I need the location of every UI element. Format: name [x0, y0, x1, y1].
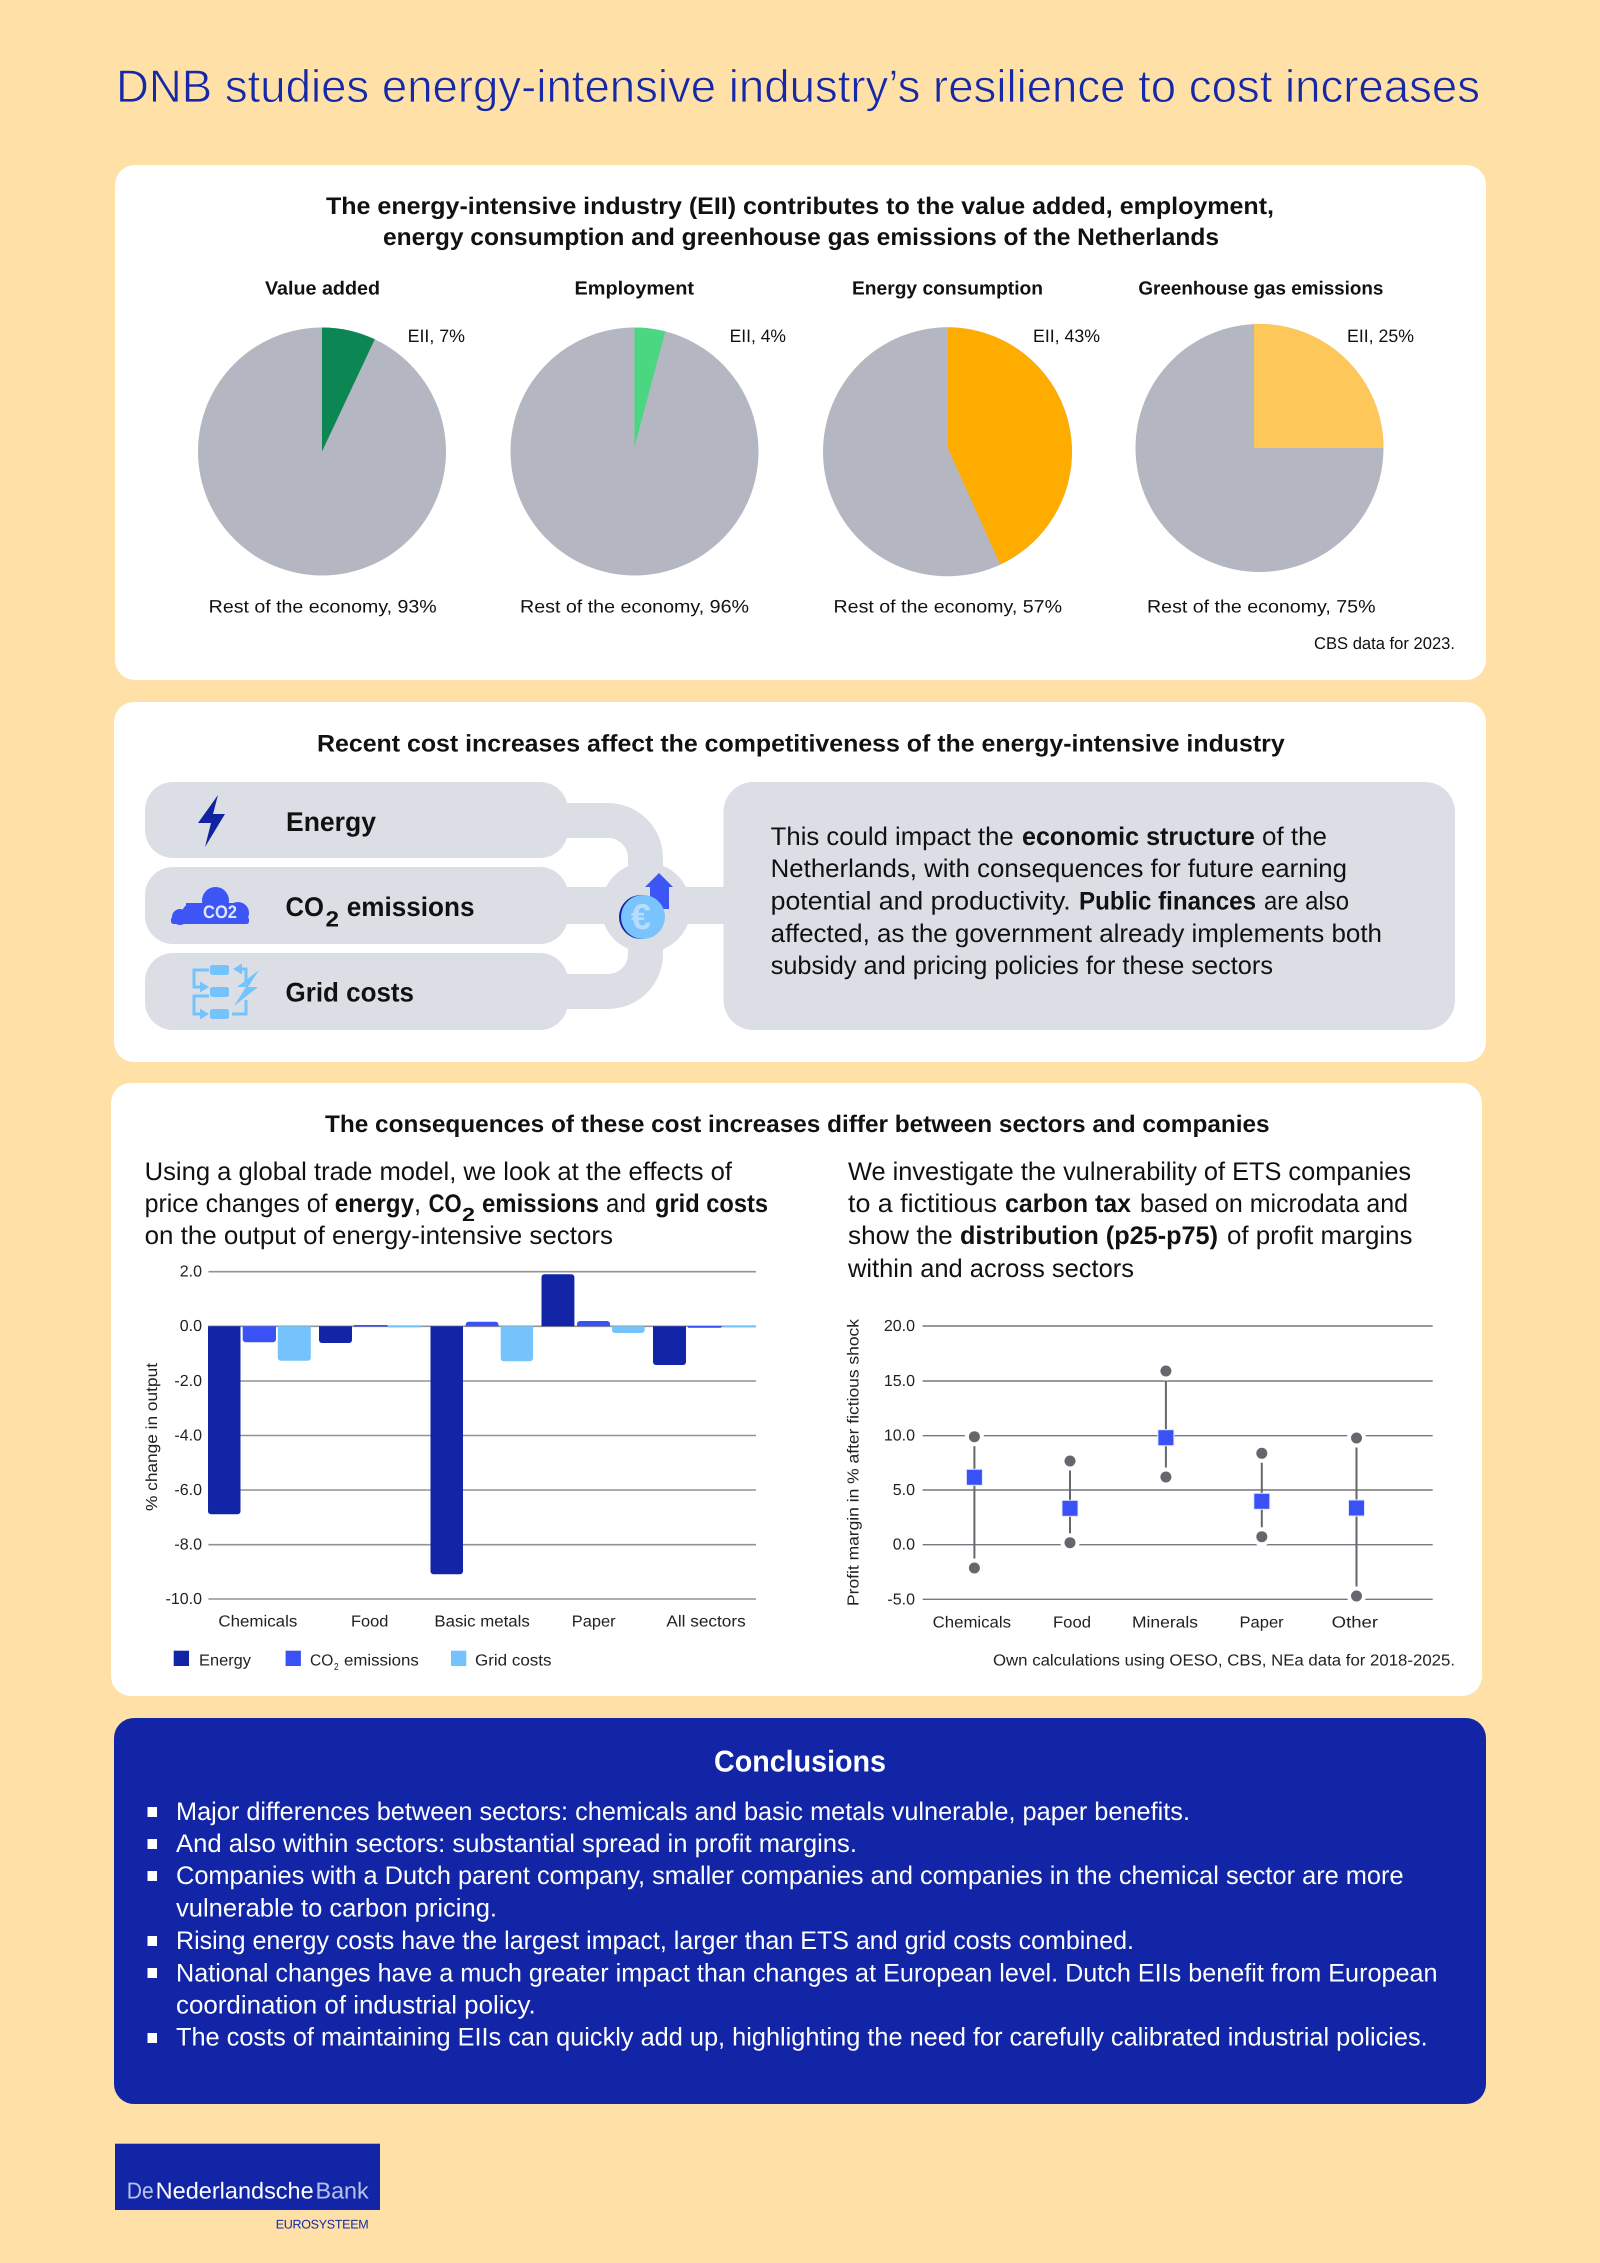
text: ETS vulnerability: of profit margins [1227, 1222, 1412, 1250]
pie chart: energy consumption: Energy consumption [852, 278, 1043, 300]
pill: CO2 emissions [145, 867, 568, 944]
pie chart: employment [510, 278, 786, 616]
legend: emissions [344, 1653, 419, 1670]
text: ETS vulnerability: carbon tax [1005, 1190, 1131, 1218]
text: global trade model: on the output of energy-intensive sectors [145, 1222, 613, 1250]
text: ETS vulnerability: based on microdata and [1140, 1190, 1408, 1218]
source note: CBS: CBS data for 2023. [1314, 634, 1455, 653]
pie chart: greenhouse gas emissions: Greenhouse gas emissions [1138, 278, 1383, 300]
text: ETS vulnerability: within and across sectors [847, 1255, 1134, 1283]
icon: euro coin with up arrow [619, 873, 673, 939]
text: global trade model: Using a global trade model, we look at the effects of [145, 1158, 733, 1186]
y axis ticks: -2.0 [174, 1373, 202, 1390]
bullet list: And also within sectors: substantial spread in profit margins. [176, 1830, 857, 1858]
source note: own calculations: Own calculations using OESO, CBS, NEa data for 2018-2025. [993, 1653, 1455, 1670]
callout: economic structure: economic structure [1022, 823, 1255, 851]
bar chart: change in output [144, 1264, 756, 1673]
bullet list: Companies with a Dutch parent company, smaller companies and companies in the chemical sector are more [176, 1862, 1404, 1890]
text: global trade model: and [606, 1190, 646, 1218]
y axis ticks: 15.0 [884, 1373, 915, 1390]
y axis ticks: -10.0 [166, 1591, 202, 1608]
text: ETS vulnerability: to a fictitious [848, 1190, 997, 1218]
x axis labels: Minerals [1132, 1614, 1198, 1631]
x axis labels: Food [1053, 1614, 1091, 1631]
pie chart: employment: EII, 4% [730, 326, 786, 346]
title: DNB studies energy-intensive industry’s resilience to cost increases [116, 60, 1480, 112]
label: CO2 emissions: 2 [326, 906, 339, 932]
x axis labels [933, 1614, 1379, 1631]
callout: economic structure: affected, as the government already implements both [771, 920, 1382, 948]
bars: grid costs [278, 1326, 756, 1361]
text: ETS vulnerability: We investigate the vulnerability of ETS companies [848, 1158, 1411, 1186]
text: global trade model: , [414, 1190, 421, 1218]
range: minerals [1158, 1366, 1174, 1482]
legend: Energy [199, 1653, 251, 1670]
x axis labels [218, 1614, 746, 1631]
logo: De Nederlandsche Bank: Bank [316, 2177, 369, 2203]
label: CO2 emissions [286, 892, 474, 932]
pie chart: value added: EII, 7% [408, 326, 465, 346]
y axis ticks: 20.0 [884, 1318, 915, 1335]
bullet list: Rising energy costs have the largest impact, larger than ETS and grid costs combined. [176, 1927, 1134, 1955]
x axis labels: Chemicals [933, 1614, 1011, 1631]
panel: consequences [111, 1083, 1482, 1696]
icon: grid network [194, 964, 259, 1020]
y axis ticks: 5.0 [893, 1482, 915, 1499]
hub circle [601, 862, 691, 952]
text: ETS vulnerability: distribution (p25-p75) [960, 1222, 1218, 1250]
logo: De Nederlandsche Bank: EUROSYSTEEM [276, 2218, 369, 2232]
range: food [1062, 1456, 1078, 1548]
callout: economic structure [724, 782, 1455, 1030]
bullet list [148, 1798, 1438, 2052]
pie chart: energy consumption: Rest of the economy, 57% [834, 596, 1062, 616]
heading: cost increases: Recent cost increases affect the competitiveness of the energy-intensive industry [317, 730, 1285, 758]
icon: CO2 cloud: CO2 [203, 902, 237, 922]
range: paper [1254, 1448, 1270, 1542]
y axis ticks [166, 1264, 202, 1608]
text: ETS vulnerability: show the [848, 1222, 953, 1250]
pill: grid costs: Grid costs [286, 978, 414, 1008]
pie chart: greenhouse gas emissions [1136, 278, 1414, 616]
range: other [1348, 1432, 1364, 1602]
logo: De Nederlandsche Bank [115, 2144, 380, 2232]
pie chart: employment: Employment [574, 278, 695, 300]
label: CO2 emissions: emissions [347, 892, 474, 922]
bars: CO2 emissions [243, 1321, 721, 1342]
heading: EII contribution: The energy-intensive industry (EII) contributes to the value added, employment, [326, 193, 1274, 220]
pill: energy: Energy [286, 807, 376, 837]
text: global trade model: CO [429, 1190, 462, 1218]
pie chart: employment: Rest of the economy, 96% [520, 596, 749, 616]
y axis label: % change in output [144, 1362, 161, 1511]
icon: lightning bolt [198, 795, 225, 847]
y axis ticks: -4.0 [174, 1428, 202, 1444]
x axis labels: Paper [572, 1614, 616, 1631]
y axis ticks [884, 1318, 915, 1608]
y axis ticks: -8.0 [174, 1536, 202, 1554]
panel: EII contribution [115, 165, 1486, 680]
pie chart: value added: Value added [265, 278, 380, 300]
heading: conclusions: Conclusions [714, 1746, 886, 1778]
bullet list: vulnerable to carbon pricing. [176, 1895, 497, 1923]
bullet list: The costs of maintaining EIIs can quickly add up, highlighting the need for carefully calibrated industrial policies. [176, 2024, 1428, 2052]
callout: economic structure: of the [1262, 823, 1327, 851]
icon: euro coin with up arrow: € [631, 896, 651, 937]
text: global trade model [145, 1158, 768, 1250]
text: global trade model: emissions [482, 1190, 599, 1218]
x axis labels: Paper [1240, 1614, 1284, 1631]
panel: cost increases [114, 702, 1486, 1062]
heading: EII contribution: energy consumption and greenhouse gas emissions of the Netherlands [383, 224, 1219, 251]
bullet list: coordination of industrial policy. [176, 1992, 536, 2020]
icon: CO2 cloud [171, 887, 249, 925]
y axis ticks: 0.0 [180, 1318, 202, 1335]
text: global trade model: grid costs [655, 1190, 768, 1218]
callout: economic structure: subsidy and pricing policies for these sectors [771, 952, 1273, 980]
bars: energy [208, 1274, 686, 1574]
callout: economic structure: Netherlands, with consequences for future earning [771, 855, 1347, 883]
pill: energy [145, 782, 568, 858]
callout: economic structure: potential and productivity. [771, 888, 1071, 916]
callout: economic structure: are also [1264, 888, 1349, 916]
logo: De Nederlandsche Bank: De [127, 2177, 154, 2203]
label: CO2 emissions: CO [286, 892, 324, 922]
legend: 2 [334, 1662, 339, 1673]
heading: EII contribution [326, 193, 1274, 251]
pie chart: greenhouse gas emissions: EII, 25% [1347, 326, 1414, 346]
range: chemicals [966, 1431, 982, 1574]
legend [174, 1651, 551, 1673]
text: global trade model: 2 [462, 1205, 475, 1226]
y axis ticks: -5.0 [887, 1591, 915, 1608]
text: global trade model: price changes of [145, 1190, 328, 1218]
connector pipes [555, 820, 735, 992]
legend: Grid costs [475, 1653, 552, 1670]
y axis ticks: 0.0 [893, 1537, 915, 1554]
x axis labels: All sectors [666, 1614, 746, 1631]
pie chart: value added [198, 278, 465, 616]
x axis labels: Chemicals [218, 1614, 297, 1631]
pie chart: value added: Rest of the economy, 93% [209, 596, 437, 616]
pie chart: greenhouse gas emissions: Rest of the economy, 75% [1147, 596, 1376, 616]
pie chart: energy consumption [823, 278, 1100, 616]
y axis ticks: 2.0 [180, 1264, 202, 1280]
callout: economic structure: Public finances [1079, 888, 1256, 916]
y axis label: Profit margin in % after fictious shock [846, 1318, 863, 1606]
text: global trade model: energy [335, 1190, 415, 1218]
text: ETS vulnerability [847, 1158, 1412, 1283]
heading: consequences: The consequences of these cost increases differ between sectors and companies [325, 1111, 1270, 1138]
y axis ticks: -6.0 [174, 1482, 202, 1499]
x axis labels: Food [351, 1614, 388, 1631]
callout: economic structure: This could impact the [771, 823, 1014, 851]
logo: De Nederlandsche Bank: Nederlandsche [156, 2177, 314, 2203]
y axis ticks: 10.0 [884, 1428, 915, 1445]
bullet list: Major differences between sectors: chemicals and basic metals vulnerable, paper benefits. [176, 1798, 1190, 1826]
pill: grid costs [145, 953, 568, 1030]
panel: conclusions [114, 1718, 1486, 2104]
legend: CO [310, 1653, 333, 1670]
x axis labels: Basic metals [434, 1614, 530, 1631]
x axis labels: Other [1332, 1614, 1379, 1631]
bullet list: National changes have a much greater impact than changes at European level. Dutch EIIs benefit from European [176, 1960, 1438, 1988]
range chart: profit margin distribution [846, 1318, 1433, 1631]
pie chart: energy consumption: EII, 43% [1033, 326, 1100, 346]
